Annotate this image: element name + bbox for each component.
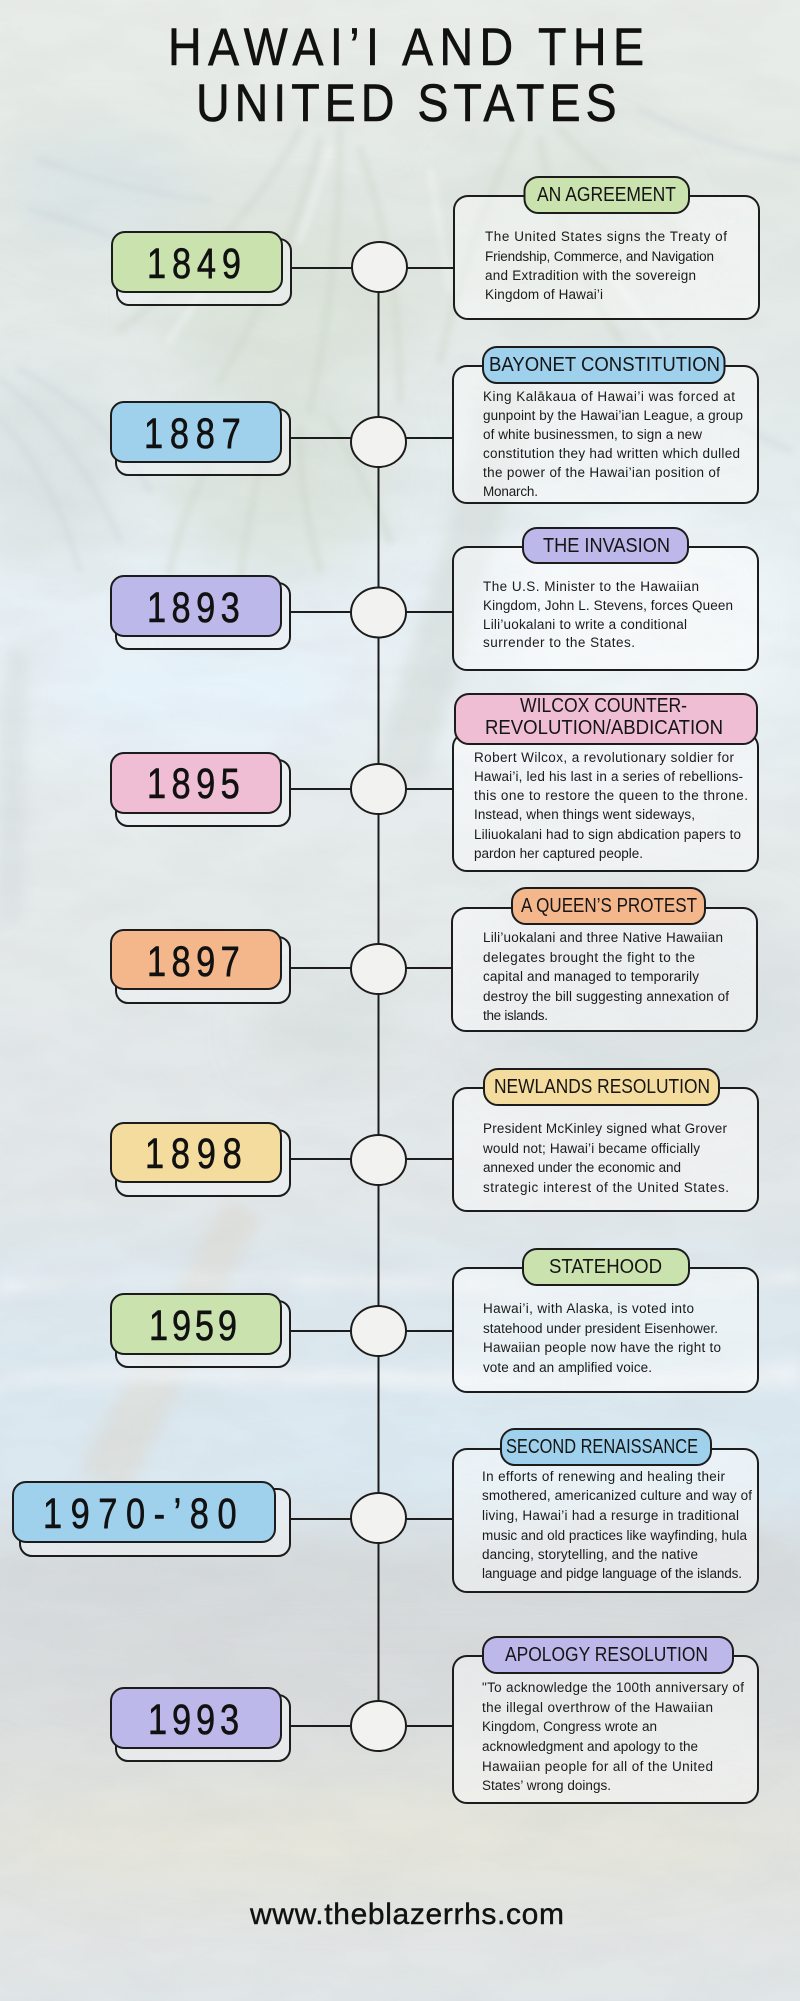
body text: this one to restore the queen to the throne. [474,788,748,803]
panel: a queen's protest [452,888,757,1031]
card box [452,908,757,1031]
year shadow card [20,1489,290,1556]
heading tab [512,888,705,924]
body text [485,229,727,302]
year box [111,753,281,813]
timeline spine [378,290,380,1703]
body text: vote and an amplified voice. [483,1360,652,1375]
connector [290,1725,452,1727]
year label: 1898 [145,1130,242,1178]
year box [111,930,281,989]
year box [13,1482,275,1542]
body text: would not; Hawai’i became officially [482,1141,700,1156]
node circle [351,1135,406,1185]
year shadow card [116,583,290,649]
year label: 1993 [148,1696,239,1744]
body text: of white businessmen, to sign a new [483,427,702,442]
body text [482,1469,752,1581]
connector [291,267,454,269]
timeline row: 1895 [111,753,453,826]
card box [453,733,758,871]
heading tab [523,528,688,563]
panel: the invasion [453,528,758,670]
heading tab: BAYONET CONSTITUTION [489,354,720,376]
body text: Hawai’i, led his last in a series of rebellions- [474,769,743,784]
heading tab [524,177,689,213]
body text [483,1301,721,1375]
connector [290,1330,453,1332]
timeline row: 1897 [111,930,453,1003]
card box [453,1268,758,1392]
panel: apology resolution [453,1637,758,1803]
body text: constitution they had written which dulled [483,446,740,461]
connector [290,967,453,969]
body text [483,389,743,499]
card box [453,1449,758,1592]
body text: destroy the bill suggesting annexation of [483,989,729,1004]
body text: living, Hawai’i had a resurge in traditional [482,1508,739,1523]
heading tab [483,347,724,383]
connector [290,788,453,790]
node circle [351,417,406,467]
body text: Kingdom, Congress wrote an [482,1719,657,1734]
body text: the islands. [483,1008,548,1023]
body text: In efforts of renewing and healing their [482,1469,726,1484]
connector [290,1518,453,1520]
year box [111,402,281,462]
year label: 1970-’80 [43,1490,237,1538]
body text: language and pidge language of the islands. [482,1566,742,1581]
body text: gunpoint by the Hawai’ian League, a group [483,408,743,423]
body text: President McKinley signed what Grover [483,1121,728,1136]
node circle [351,764,406,814]
timeline row: 1893 [111,576,453,649]
body text: the illegal overthrow of the Hawaiian [482,1700,713,1715]
body text: Liliuokalani had to sign abdication papers to [474,827,741,842]
year label: 1849 [147,240,241,288]
body text: dancing, storytelling, and the native [482,1547,698,1562]
body text: "To acknowledge the 100th anniversary of [482,1680,744,1695]
card box [453,547,758,670]
year shadow card [116,1301,290,1367]
body text: music and old practices like wayfinding, hula [482,1528,747,1543]
heading tab [523,1249,689,1285]
heading tab [501,1429,711,1465]
body text: Friendship, Commerce, and Navigation [485,249,714,264]
body text: Robert Wilcox, a revolutionary soldier for [474,750,734,765]
body text: Monarch. [483,484,538,499]
heading tab: WILCOX COUNTER- [520,695,687,717]
node circle [351,1306,406,1356]
body text: annexed under the economic and [483,1160,681,1175]
card box [454,196,759,319]
body text: strategic interest of the United States. [483,1180,729,1195]
card box [453,366,758,503]
node circle [352,242,407,292]
heading tab: REVOLUTION/ABDICATION [485,717,723,739]
heading tab: AN AGREEMENT [537,184,676,206]
timeline row: 1849 [112,232,454,305]
body text: delegates brought the fight to the [483,950,695,965]
footer url: www.theblazerrhs.com [249,1898,564,1931]
year box [111,576,281,636]
body text: Lili’uokalani to write a conditional [483,617,687,632]
panel: wilcox counter-revolution/abdication [453,694,758,871]
body text [483,579,733,650]
node circle [351,1493,406,1543]
node circle [351,588,406,638]
year shadow card [116,760,290,826]
heading tab [484,1069,719,1105]
timeline row: 1993 [111,1688,452,1761]
timeline row: 1898 [111,1123,453,1196]
title [168,17,644,133]
body text: Hawaiian people now have the right to [483,1340,721,1355]
year shadow card [117,239,291,305]
body text: the power of the Hawai’ian position of [483,465,720,480]
timeline row: 1970-'80 [13,1482,453,1556]
year label: 1959 [149,1302,237,1350]
body text: acknowledgment and apology to the [482,1739,698,1754]
year shadow card [116,1130,290,1196]
node circle [351,944,406,994]
heading tab: APOLOGY RESOLUTION [505,1644,708,1666]
body text: Kingdom of Hawai’i [485,287,603,302]
panel: second renaissance [453,1429,758,1592]
body text: Kingdom, John L. Stevens, forces Queen [483,598,733,613]
body text: smothered, americanized culture and way of [482,1488,752,1503]
heading tab [483,1637,733,1673]
year box [111,1123,281,1182]
heading tab [455,694,757,744]
body text: surrender to the States. [483,635,635,650]
year label: 1893 [147,584,240,632]
year shadow card [116,409,290,475]
body text: capital and managed to temporarily [483,969,699,984]
body text: and Extradition with the sovereign [485,268,696,283]
panel: an agreement [454,177,759,319]
heading tab: NEWLANDS RESOLUTION [494,1076,710,1098]
body text [483,930,729,1023]
heading tab: SECOND RENAISSANCE [506,1436,698,1458]
year box [112,232,282,292]
title: UNITED STATES [196,73,617,133]
heading tab: THE INVASION [543,535,670,557]
timeline row: 1887 [111,402,453,475]
timeline row: 1959 [111,1294,453,1367]
connector [290,611,453,613]
year label: 1895 [147,760,240,808]
body text: King Kalākaua of Hawai’i was forced at [483,389,735,404]
card box [453,1088,758,1211]
year box [111,1688,281,1748]
body text [482,1121,729,1195]
body text: The U.S. Minister to the Hawaiian [483,579,699,594]
body text: Hawaiian people for all of the United [482,1759,713,1774]
body text: Instead, when things went sideways, [474,807,695,822]
panel: statehood [453,1249,758,1392]
body text: Hawai’i, with Alaska, is voted into [483,1301,694,1316]
body text: States’ wrong doings. [482,1778,611,1793]
connector [290,437,453,439]
panel: bayonet constitution [453,347,758,503]
year shadow card [116,1695,290,1761]
title: HAWAI’I AND THE [168,17,644,77]
heading tab: A QUEEN’S PROTEST [521,895,697,917]
year label: 1887 [144,410,241,458]
body text [474,750,748,861]
heading tab: STATEHOOD [549,1256,662,1278]
panel: newlands resolution [453,1069,758,1211]
body text: statehood under president Eisenhower. [483,1321,718,1336]
connector [290,1158,453,1160]
year label: 1897 [147,938,240,986]
node circle [351,1701,406,1751]
card box [453,1656,758,1803]
body text: pardon her captured people. [474,846,643,861]
body text: The United States signs the Treaty of [485,229,727,244]
body text: Lili’uokalani and three Native Hawaiian [483,930,723,945]
year shadow card [116,937,290,1003]
year box [111,1294,281,1354]
body text [482,1680,744,1793]
